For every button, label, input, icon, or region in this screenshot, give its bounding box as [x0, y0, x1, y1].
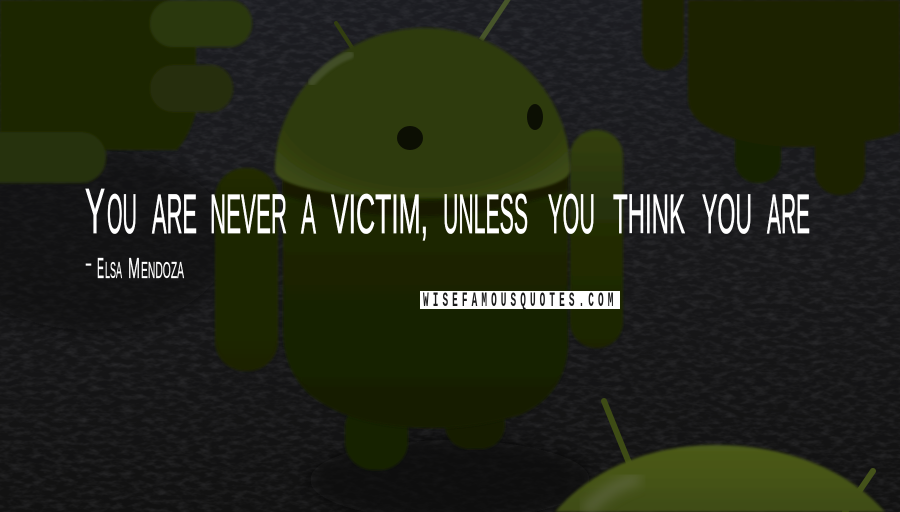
- quote text: UNLESS: [443, 182, 528, 245]
- right leg: [445, 400, 505, 449]
- quote text: ARE: [152, 182, 197, 245]
- quote text: A: [301, 182, 316, 245]
- quote text: Y: [85, 175, 105, 247]
- author attribution: E: [97, 253, 104, 285]
- author attribution: -: [85, 250, 92, 276]
- left eye: [397, 126, 423, 150]
- quote text: NEVER: [210, 182, 287, 245]
- infographic canvas: ENDOZA: [141, 257, 184, 283]
- dome: [555, 445, 885, 512]
- android: top right: [642, 0, 900, 195]
- torso: [283, 170, 568, 428]
- left arm: [215, 168, 278, 371]
- quote text: OU: [107, 182, 137, 245]
- antenna right: [845, 471, 873, 512]
- author attribution: [85, 250, 184, 285]
- infographic canvas: ARE: [767, 182, 810, 245]
- dome highlight: [585, 478, 640, 512]
- quote text: YOU: [702, 182, 752, 245]
- head: [275, 28, 570, 198]
- author attribution: M: [128, 253, 140, 285]
- left leg: [345, 400, 408, 470]
- android: bottom right: [555, 401, 885, 512]
- quote text: THINK: [613, 182, 685, 245]
- author attribution: LSA: [105, 257, 122, 283]
- antenna left: [604, 401, 640, 490]
- right arm: [570, 130, 623, 348]
- quote text: VICTIM,: [331, 182, 428, 245]
- quote text: [85, 175, 810, 247]
- right antenna: [481, 0, 509, 40]
- head highlight: [312, 55, 350, 82]
- watermark badge: WISEFAMOUSQUOTES.COM: [423, 289, 617, 312]
- quote text: YOU: [548, 182, 595, 245]
- android: main figure: [215, 0, 623, 470]
- left antenna: [336, 23, 364, 66]
- right eye: [527, 104, 543, 130]
- collar shadow: [283, 175, 568, 216]
- android: top left: [0, 0, 252, 183]
